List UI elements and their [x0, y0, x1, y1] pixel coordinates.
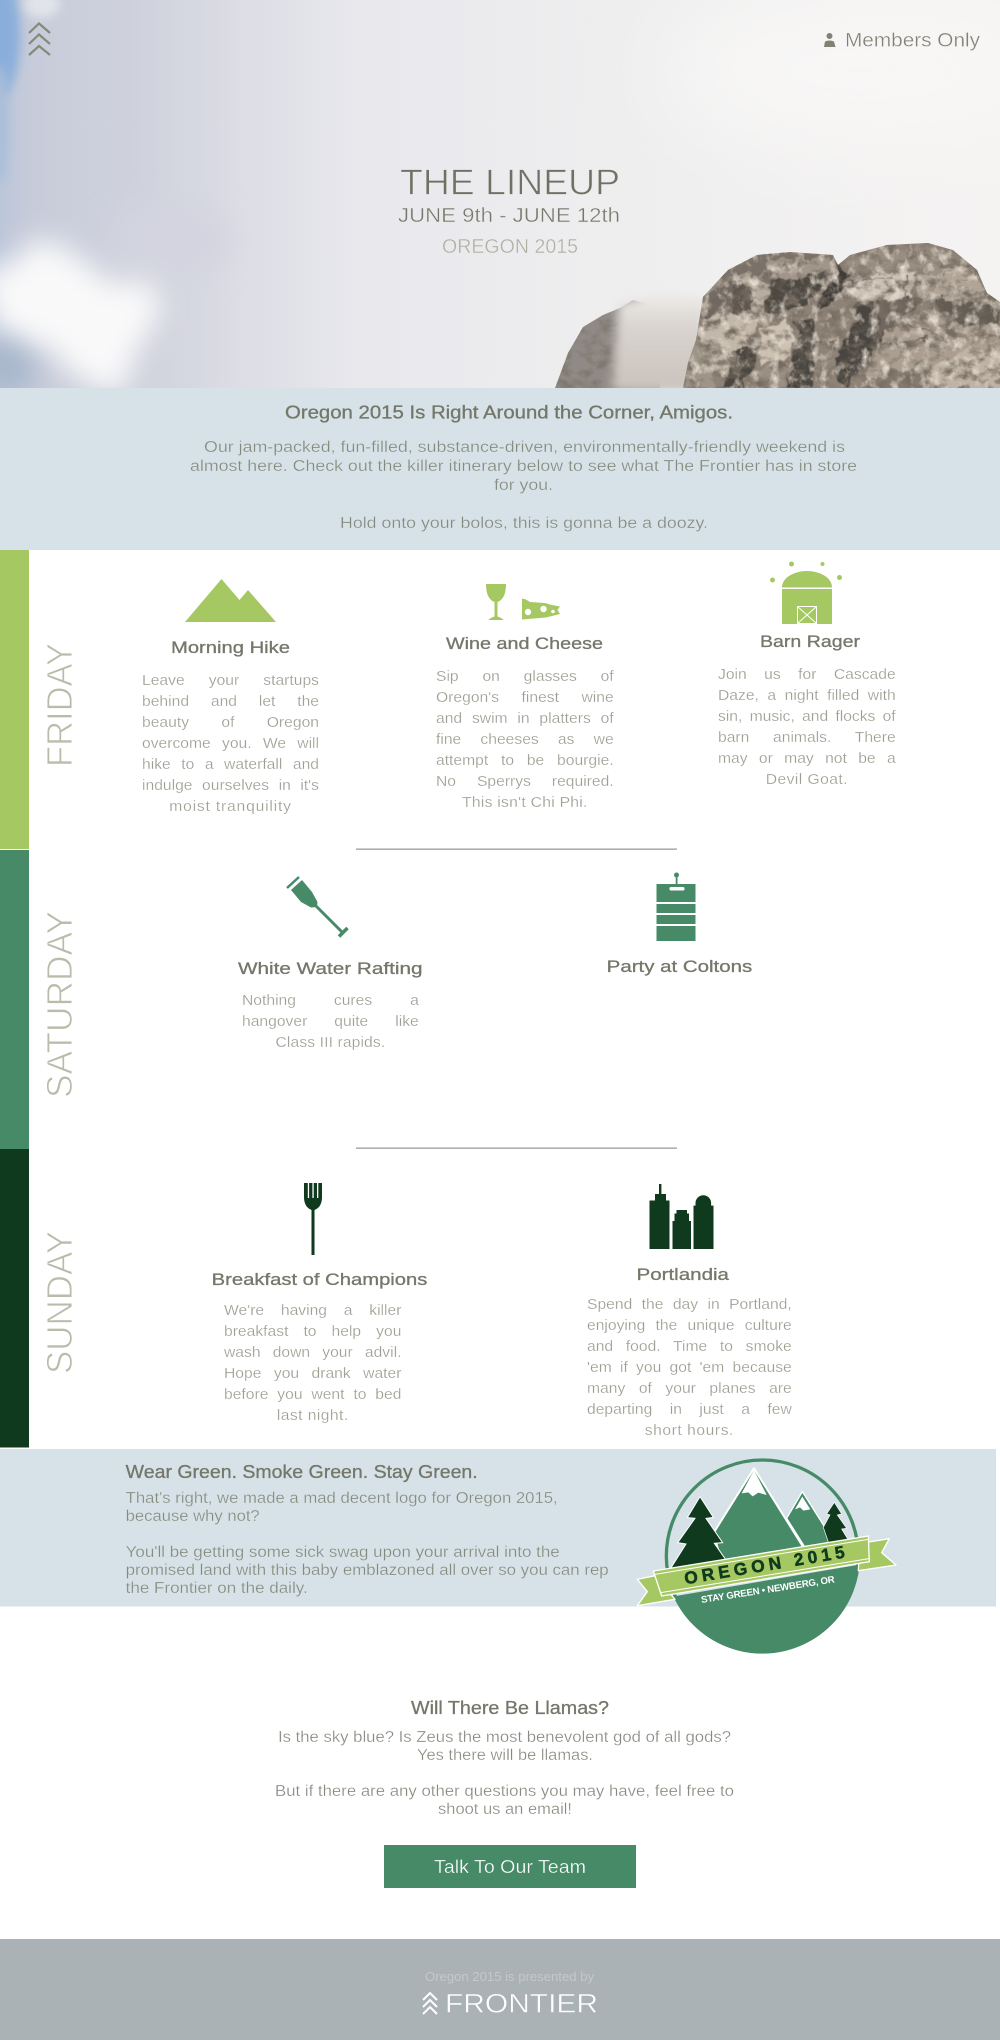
- text: wine and cheese description: No Sperrys required.: [436, 774, 613, 790]
- label: saturday: SATURDAY: [39, 911, 80, 1098]
- heading: wine and cheese: Wine and Cheese: [446, 634, 603, 653]
- text: barn rager description: [718, 666, 896, 788]
- panel: llamas faq: Is the sky blue? Is Zeus the most benevolent god of all gods?: [278, 1729, 731, 1746]
- icon: barn: [770, 562, 842, 624]
- text: portlandia description: short hours.: [644, 1423, 734, 1439]
- panel: logo band: Wear Green. Smoke Green. Stay Green.: [126, 1462, 478, 1482]
- text: morning hike description: moist tranquility: [169, 798, 292, 814]
- panel: logo band: because why not?: [126, 1508, 260, 1525]
- panel: llamas faq: shoot us an email!: [438, 1801, 572, 1818]
- text: portlandia description: 'em if you got 'em because: [587, 1360, 791, 1376]
- text: portlandia description: Spend the day in Portland,: [587, 1297, 791, 1313]
- text: barn rager description: sin, music, and flocks of: [718, 708, 895, 724]
- badge tagline: STAY GREEN • NEWBERG, OR: [700, 1574, 836, 1606]
- badge ribbon tails: [637, 1539, 896, 1606]
- footer frontier logo: FRONTIER: [445, 1988, 598, 2018]
- text: breakfast description: [224, 1303, 402, 1424]
- panel: logo band: You'll be getting some sick swag upon your arrival into the: [126, 1544, 560, 1561]
- text: breakfast description: before you went to bed: [224, 1387, 401, 1403]
- text: barn rager description: Join us for Cascade: [718, 666, 895, 682]
- logo badge: oregon 2015: [633, 1460, 896, 1673]
- panel: llamas faq: Yes there will be llamas.: [417, 1747, 593, 1764]
- label: friday: FRIDAY: [39, 643, 80, 767]
- badge small mountain: [787, 1492, 835, 1550]
- text: wine and cheese description: and swim in platters of: [436, 710, 613, 726]
- misty rock behind: [555, 298, 702, 388]
- text: morning hike description: beauty of Oregon: [142, 714, 319, 730]
- panel: intro band: for you.: [494, 477, 553, 494]
- saturday day bar: [0, 850, 29, 1149]
- text: wine and cheese description: This isn't Chi Phi.: [462, 794, 587, 810]
- title: THE LINEUP: [400, 162, 620, 203]
- title: JUNE 9th - JUNE 12th: [398, 205, 620, 227]
- badge ribbon: [653, 1536, 869, 1596]
- panel: intro band: Our jam-packed, fun-filled, substance-driven, environmentally-friendly weekend is: [204, 439, 845, 456]
- title: OREGON 2015: [442, 236, 578, 258]
- icon: fork: [304, 1183, 322, 1255]
- sunday day bar: [0, 1149, 29, 1448]
- members only link: Members Only: [845, 30, 981, 52]
- icon: triple chevron logo: [29, 24, 50, 55]
- text: barn rager description: Daze, a night filled with: [718, 688, 895, 704]
- panel: intro band: Hold onto your bolos, this is gonna be a doozy.: [340, 515, 708, 532]
- text: wine and cheese description: fine cheeses as we: [436, 732, 613, 748]
- badge lower fill: [676, 1565, 856, 1652]
- heading: barn rager: Barn Rager: [760, 632, 860, 651]
- panel: intro band: Oregon 2015 Is Right Around the Corner, Amigos.: [285, 402, 733, 422]
- text: barn rager description: Devil Goat.: [765, 772, 847, 788]
- icon: city skyline: [650, 1184, 714, 1249]
- panel: logo band: the Frontier on the daily.: [126, 1580, 308, 1597]
- panel: logo band: promised land with this baby emblazoned all over so you can rep: [126, 1562, 609, 1579]
- label: sunday: SUNDAY: [39, 1231, 80, 1374]
- icon: paddle: [287, 877, 348, 936]
- text: barn rager description: barn animals. There: [718, 730, 895, 746]
- heading: breakfast of champions: Breakfast of Champions: [212, 1270, 427, 1289]
- text: morning hike description: behind and let the: [142, 694, 319, 710]
- friday day bar: [0, 550, 29, 849]
- panel: intro band: almost here. Check out the killer itinerary below to see what The Frontier has in store: [190, 458, 857, 475]
- text: morning hike description: indulge ourselves in it's: [142, 778, 319, 794]
- heading: white water rafting: White Water Rafting: [238, 959, 422, 978]
- button: talk to our team: Talk To Our Team: [434, 1857, 586, 1877]
- text: portlandia description: departing in just a few: [587, 1402, 791, 1418]
- badge right tree: [823, 1502, 849, 1545]
- panel: logo band: That's right, we made a mad decent logo for Oregon 2015,: [126, 1490, 558, 1507]
- heading: morning hike: Morning Hike: [171, 638, 290, 657]
- text: white water rafting description: [242, 992, 419, 1050]
- text: portlandia description: enjoying the unique culture: [587, 1318, 791, 1334]
- text: morning hike description: overcome you. We will: [142, 736, 319, 752]
- text: portlandia description: and food. Time to smoke: [587, 1339, 791, 1355]
- text: breakfast description: breakfast to help you: [224, 1324, 401, 1340]
- badge big mountain: [713, 1468, 813, 1573]
- badge ribbon text: OREGON 2015: [683, 1542, 846, 1588]
- panel: llamas faq: Will There Be Llamas?: [411, 1698, 609, 1718]
- text: wine and cheese description: [436, 668, 614, 810]
- text: morning hike description: hike to a waterfall and: [142, 756, 319, 772]
- text: white water rafting description: Nothing cures a: [242, 992, 419, 1008]
- footer: [0, 1939, 1000, 2040]
- text: breakfast description: wash down your advil.: [224, 1345, 401, 1361]
- panel: llamas faq: But if there are any other questions you may have, feel free to: [275, 1783, 734, 1800]
- text: breakfast description: last night.: [277, 1408, 349, 1424]
- button: talk to our team: [384, 1845, 636, 1888]
- text: breakfast description: We're having a killer: [224, 1303, 401, 1319]
- icon: mountains: [185, 579, 276, 622]
- panel: llamas faq: [275, 1698, 734, 1818]
- badge left tree: [671, 1497, 726, 1568]
- text: portlandia description: many of your planes are: [587, 1381, 791, 1397]
- panel: logo band: [0, 1449, 996, 1606]
- heading: portlandia: Portlandia: [636, 1265, 730, 1284]
- title: [398, 162, 620, 258]
- text: morning hike description: [142, 672, 319, 814]
- text: barn rager description: may or may not be a: [718, 750, 895, 766]
- panel: intro band: [0, 388, 1000, 550]
- icon: keg: [656, 872, 696, 941]
- text: wine and cheese description: attempt to be bourgie.: [436, 752, 613, 768]
- text: wine and cheese description: Sip on glasses of: [436, 668, 613, 684]
- foreground rock: [683, 243, 1000, 388]
- footer: Oregon 2015 is presented by: [425, 1970, 595, 1984]
- icon: wine and cheese: [486, 584, 560, 620]
- text: wine and cheese description: Oregon's finest wine: [436, 690, 613, 706]
- text: white water rafting description: hangover quite like: [242, 1014, 419, 1030]
- text: breakfast description: Hope you drank water: [224, 1366, 401, 1382]
- text: portlandia description: [587, 1297, 792, 1439]
- hero photo: misty sky and rock peak: [0, 0, 1000, 395]
- text: white water rafting description: Class III rapids.: [276, 1034, 385, 1050]
- text: morning hike description: Leave your startups: [142, 672, 319, 688]
- heading: party at coltons: Party at Coltons: [607, 957, 752, 976]
